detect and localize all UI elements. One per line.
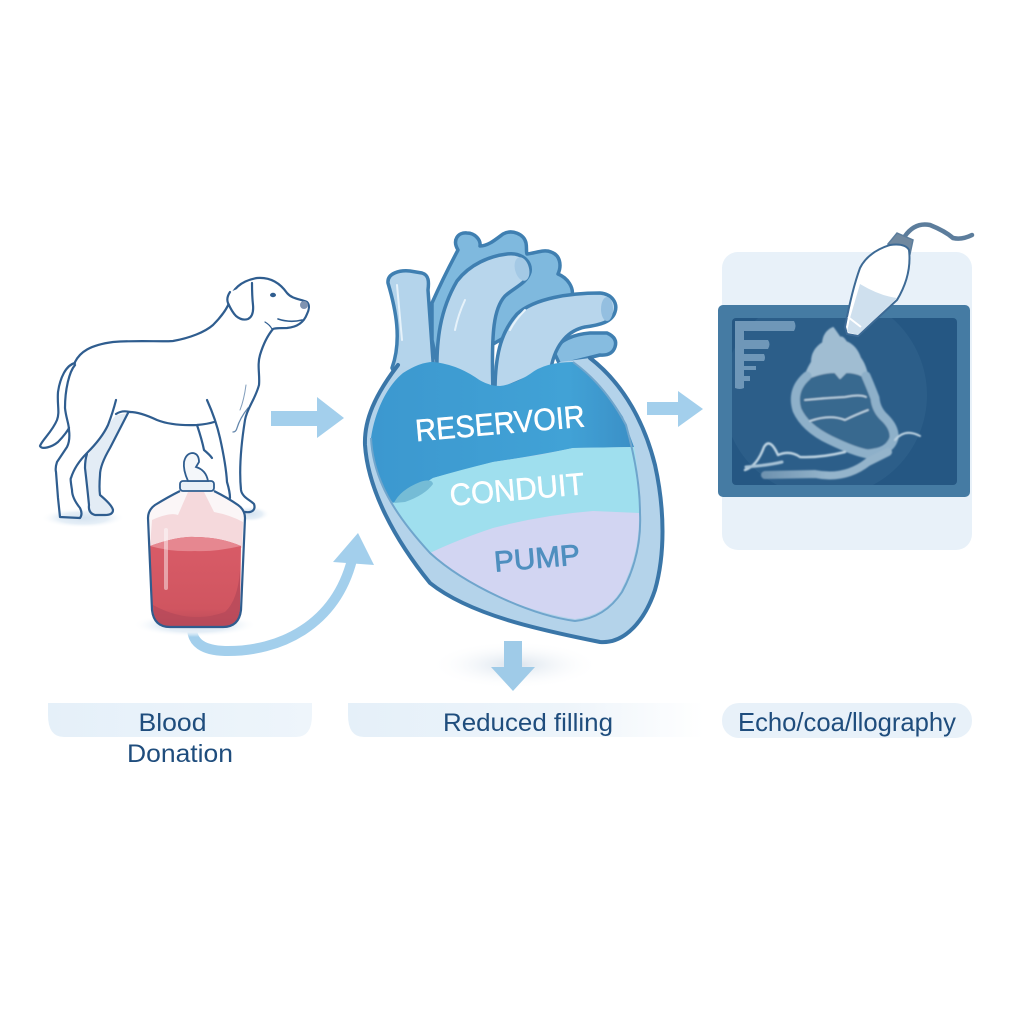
arrow: dog to heart — [271, 397, 344, 438]
inner wall line — [371, 362, 640, 621]
arrow: reduced filling — [491, 641, 535, 691]
outer heart wall fill — [365, 358, 662, 642]
icon: heart — [365, 232, 662, 642]
valve detail — [394, 480, 433, 503]
scan sector — [723, 293, 927, 497]
reservoir chamber — [371, 362, 634, 503]
aorta opening — [512, 256, 532, 282]
label: CONDUIT: CONDUIT — [448, 466, 586, 513]
icon: dog outline — [40, 278, 309, 518]
label: RESERVOIR: RESERVOIR — [414, 399, 586, 448]
arrow: heart to echo — [647, 391, 703, 427]
tail — [40, 363, 75, 448]
infographic canvas — [38, 222, 974, 762]
icon: blood bottle — [148, 453, 245, 627]
far hind leg — [85, 411, 130, 515]
panel: echo screen — [718, 293, 970, 497]
vessel highlights — [397, 285, 525, 340]
small rear vessel — [553, 333, 616, 365]
ruler scale — [735, 321, 796, 389]
dog shadows — [41, 506, 270, 528]
pump chamber — [430, 511, 639, 619]
arch opening — [601, 297, 613, 321]
panel: echo backdrop — [722, 252, 972, 550]
heart wall outline — [365, 358, 662, 642]
aorta — [437, 254, 530, 392]
conduit chamber — [393, 447, 639, 553]
panel: blood donation label: Donation — [127, 740, 233, 768]
superior vena cava — [388, 271, 434, 385]
pulmonary arch — [495, 293, 616, 392]
near hind leg — [56, 365, 116, 518]
curved arrow: bag to heart — [192, 533, 374, 651]
panel: reduced filling label: Reduced filling — [443, 709, 613, 737]
echo heart image — [745, 328, 920, 476]
back pulmonary vessels — [432, 232, 572, 375]
panel: reduced filling label — [348, 703, 704, 737]
down shadow — [430, 641, 600, 689]
panel: echo label: Echo/coa/llography — [738, 707, 956, 737]
icon: ultrasound probe — [845, 224, 972, 336]
panel: blood donation label — [48, 703, 312, 768]
bag shadow — [133, 613, 257, 637]
panel: blood donation label: Blood — [138, 709, 206, 737]
label: PUMP: PUMP — [493, 539, 581, 579]
